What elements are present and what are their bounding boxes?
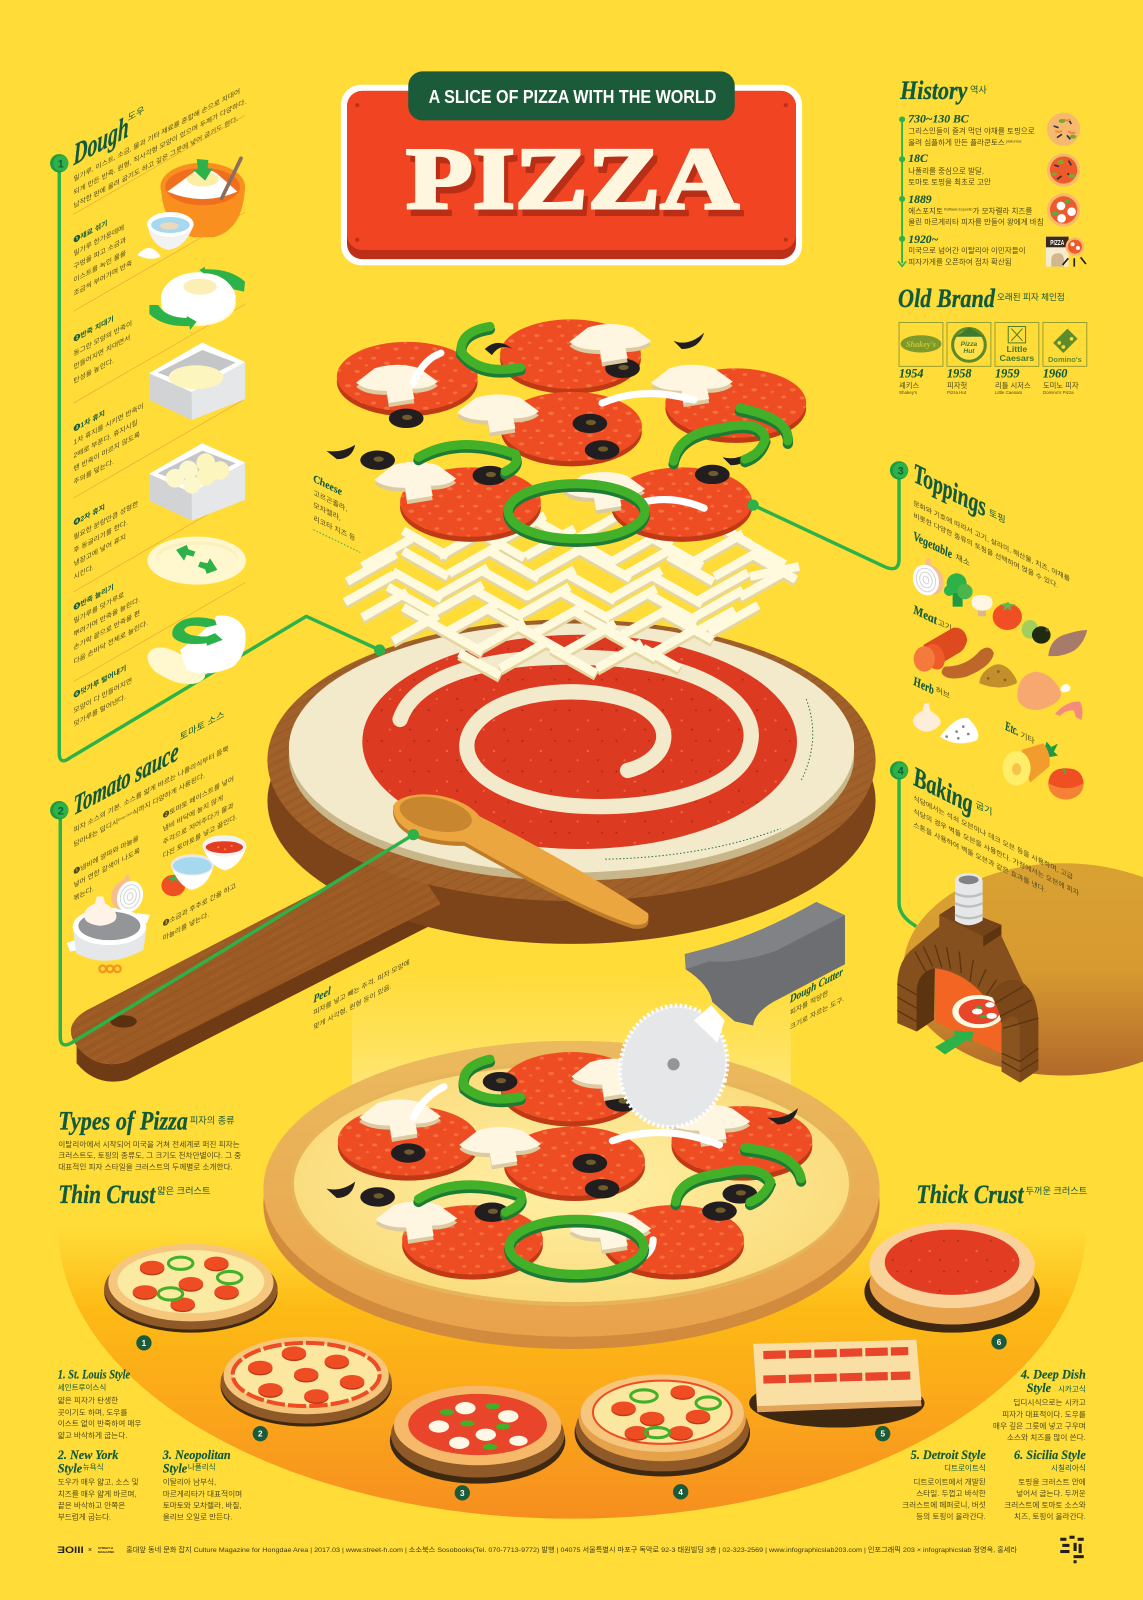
- style 3 text: 토마토와 모차렐라, 바질,: [163, 1500, 242, 1510]
- sauce steps 2 and 3: 다진 토마토를 넣고 끓인다.: [163, 812, 237, 860]
- panel: tomato sauce: [74, 706, 229, 903]
- step 2: 만들어지면 치대면서: [74, 333, 130, 371]
- style 4 text: Style: [1027, 1381, 1052, 1395]
- icon: sauce bowl: [202, 835, 247, 871]
- section number 4: 4: [897, 765, 904, 777]
- icon: tomato pizza: [1047, 153, 1080, 187]
- style 1 text: 세인트루이스식: [58, 1382, 106, 1392]
- brand 1959: 리틀 시저스: [995, 381, 1031, 390]
- callout: dough cutter: 크기로 자르는 도구.: [790, 994, 844, 1031]
- icon: tomato: [161, 874, 185, 896]
- icon: water bowl: [171, 854, 214, 890]
- callout: dough cutter: 피자를 적당한: [790, 988, 829, 1017]
- style 6 text: 6. Sicilia Style: [1014, 1448, 1086, 1462]
- label: vegetable Korean: 채소: [956, 552, 970, 568]
- section number 3: [890, 461, 908, 480]
- entry 18C: 토마토 토핑을 최초로 고안: [908, 177, 991, 187]
- step 2: 탄성을 높인다.: [74, 356, 114, 386]
- number badges: [136, 1334, 1007, 1501]
- icon: sausage: [942, 648, 994, 678]
- number badges: 5: [880, 1430, 885, 1439]
- step 5: 다음 손바닥 전체로 늘린다.: [74, 618, 148, 666]
- entry 730-130 BC: 730~130 BC: [908, 112, 969, 125]
- style 6 text: 치즈, 토핑이 올라간다.: [1014, 1511, 1086, 1521]
- logo: Pizza Hut: Hut: [963, 348, 975, 355]
- entry 730-130 BC: plakuntos: [1005, 139, 1022, 143]
- sauce steps 2 and 3: 마늘리를 넣는다.: [163, 910, 209, 943]
- intro: 이탈리아에서 시작되어 미국을 거쳐 전세계로 퍼진 피자는: [58, 1139, 240, 1149]
- panel: toppings text: [913, 456, 1070, 765]
- icon: pizzeria: [1046, 237, 1086, 267]
- style 2 text: 치즈를 매우 얇게 바르며,: [58, 1488, 137, 1498]
- section number 1: [50, 154, 68, 172]
- style 6 text: 시칠리아식: [1051, 1462, 1086, 1472]
- step 4: 필요한 분량만큼 성형한: [74, 499, 139, 542]
- icon: plate with dough: [147, 537, 246, 585]
- logo: Little Caesars: Little: [1007, 344, 1027, 354]
- label: vegetable: Vegetable: [913, 528, 952, 562]
- footer: [57, 1536, 1084, 1563]
- brand 1960: 1960: [1043, 367, 1067, 381]
- pizza cutter: [606, 902, 845, 1139]
- icon: ground meat: [979, 664, 1017, 687]
- style 5 text: 등의 토핑이 올라간다.: [916, 1511, 986, 1521]
- footer logos: STREET-H: [98, 1546, 113, 1550]
- street-h logo: [1060, 1536, 1084, 1563]
- step 3: 주의를 덮는다.: [74, 457, 114, 487]
- brand 1960: [1043, 367, 1079, 395]
- style 2 text: Style: [58, 1461, 83, 1475]
- baking paragraph: 식당의 경우 벽돌 오븐을 사용한다. 가정에서는 오븐에 피자: [913, 807, 1079, 898]
- brand 1954: Shakey's: [899, 390, 918, 395]
- step 6: 덧가루를 털어낸다.: [74, 692, 126, 728]
- entry 730-130 BC: 그리스인들이 즐겨 먹던 야채를 토핑으로: [908, 126, 1035, 136]
- style 4 text: [993, 1368, 1086, 1442]
- wooden spoon: [393, 791, 648, 929]
- step 4: 시킨다.: [74, 562, 94, 581]
- style 2 text: 뉴욕식: [83, 1462, 104, 1471]
- callout: peel: Peel: [313, 983, 331, 1006]
- logo: Pizza Hut: Pizza: [961, 341, 978, 348]
- history icons: [1046, 113, 1086, 267]
- sauce steps 2 and 3: 주걱으로 저어주다가 물과: [163, 800, 234, 847]
- entry 1889: 올린 마르게리타 피자를 만들어 왕에게 바침: [908, 216, 1044, 226]
- label: etc: 기타: [1020, 730, 1035, 746]
- step 1: 밀가루 한가운데에: [74, 223, 124, 258]
- style 2 text: [57, 1448, 139, 1521]
- intro: [58, 1139, 241, 1171]
- baked pizza: [263, 1041, 880, 1349]
- pizza 1: St. Louis: [104, 1244, 278, 1333]
- sauce step 1: ❶냄비에 양파와 마늘을: [74, 833, 139, 876]
- step 6: [74, 660, 132, 728]
- step 1: [74, 205, 133, 298]
- sauce steps 2 and 3: ❸소금과 후추로 간을 하고: [163, 881, 236, 928]
- step 5: 밀가루를 덧가루로: [74, 590, 125, 625]
- sauce steps 2 and 3: ❷토마토 페이스트를 넣어: [163, 774, 234, 820]
- heading: Korean: 오래된 피자 체인점: [997, 291, 1065, 302]
- entry 730-130 BC: [908, 112, 1035, 147]
- brand 1959: Little Caesars: [995, 390, 1023, 395]
- pizza 4: Deep Dish style: [575, 1374, 750, 1477]
- heading: Baking: Baking: [913, 759, 973, 821]
- arrow: into oven: [935, 1031, 973, 1055]
- thin and thick crust backdrop arc: [58, 1228, 1086, 1519]
- right pillar: [990, 980, 1038, 1082]
- logo: Little Caesars: Caesars: [1000, 353, 1034, 363]
- step 1: 조금씩 부어가며 반죽: [74, 258, 133, 298]
- step 3: 땐 반죽이 마르지 않도록: [74, 429, 140, 473]
- entry 18C: 나폴리를 중심으로 발달,: [908, 165, 984, 175]
- style 2 text: 끝은 바삭하고 안쪽은: [58, 1500, 125, 1510]
- entry 18C: 18C: [908, 152, 928, 165]
- pizza 3: Neapolitan: [390, 1386, 565, 1484]
- toppings: [327, 1052, 812, 1280]
- step 3: 2배로 부푼다. 휴지시킬: [74, 418, 138, 460]
- intro: 대표적인 피자 스타일을 크러스트의 두께별로 소개한다.: [58, 1161, 233, 1171]
- footer logos: MAGAZINE: [98, 1550, 114, 1554]
- heading: Dough: Dough: [73, 110, 129, 173]
- step 2: [74, 304, 132, 386]
- style 6 text: 넣어서 굽는다. 두꺼운: [1016, 1488, 1086, 1498]
- icon: mushroom: [972, 595, 993, 616]
- number badges: 3: [460, 1489, 465, 1498]
- connector nodes: [374, 499, 759, 840]
- icon: chicken: [1017, 672, 1070, 710]
- dough intro: 밀가루, 이스트, 소금, 물과 기타 재료를 혼합해 손으로 치대어: [74, 87, 240, 184]
- section number 3: 3: [897, 465, 904, 477]
- icon: garlic: [913, 703, 941, 732]
- panel: types of pizza: [58, 1106, 1087, 1209]
- heading: Types of Pizza: Types of Pizza: [58, 1106, 188, 1136]
- cheese shreds: [345, 513, 799, 679]
- subtitle pill: A SLICE OF PIZZA WITH THE WORLD: [429, 86, 716, 107]
- style 5 text: [902, 1448, 986, 1521]
- style 5 text: 디트로이트에서 개발된: [913, 1477, 986, 1487]
- label: herb: Herb: [913, 673, 934, 698]
- step 3: [74, 388, 144, 487]
- style 4 text: 시카고식: [1058, 1384, 1086, 1393]
- sauce intro: 담아내는 딥디시: [74, 818, 118, 849]
- callout: cheese: Cheese: [313, 471, 342, 498]
- icon: broccoli: [944, 573, 973, 607]
- label: meat Korean: 고기: [938, 618, 952, 633]
- step 1: ❶재료 섞기: [74, 218, 107, 245]
- brand 1959: [995, 367, 1031, 395]
- icon: margherita: [1047, 193, 1080, 227]
- brand 1960: Domino's Pizza: [1043, 390, 1074, 395]
- glow behind baked pizza: [352, 969, 791, 1122]
- entry 1889: 1889: [908, 193, 932, 206]
- step 3: 1차 휴지를 시키면 반죽이: [74, 401, 144, 447]
- label: herb Korean: 허브: [936, 685, 950, 701]
- sauce step 1: 볶는다.: [74, 884, 94, 903]
- style 4 text: 피자가 대표적이다. 도우를: [1002, 1409, 1086, 1419]
- style 4 text: 4. Deep Dish: [1020, 1368, 1086, 1382]
- intro: 크러스트도, 토핑의 종류도, 그 크기도 천차만별이다. 그 중: [58, 1150, 241, 1160]
- style 2 text: 도우가 매우 얇고, 소스 및: [58, 1477, 139, 1487]
- title panel: [341, 71, 802, 265]
- icon: garlic: [84, 897, 116, 926]
- floating toppings: [327, 319, 806, 542]
- label: meat: Meat: [913, 602, 938, 629]
- sauce intro: Deep Dish: [118, 811, 133, 822]
- timeline: [898, 116, 906, 266]
- pizza in oven: [952, 995, 1004, 1028]
- label: etc: [1005, 718, 1035, 748]
- entry 1920: [908, 233, 1026, 266]
- entry 1889: Raffaele Esposito: [943, 208, 973, 212]
- brand 1954: 1954: [899, 367, 924, 381]
- brand 1958: Pizza Hut: [947, 390, 967, 395]
- entry 730-130 BC: 올려 심플하게 만든 플라쿤토스: [908, 138, 1005, 147]
- footer credits: 홍대앞 동네 문화 잡지 Culture Magazine for Hongdae Area | 2017.03 | www.street-h.com | 소소북스 Sosobooks(Tel. 070-7713-9772) 발행 | 04075 서울특별시 마포구 독막로 92-3 태원빌딩 3층 | 02-323-2569 | www.infographicslab203.com | 인포그래픽 203 × infographicslab 정영옥, 홍세라: [126, 1545, 1017, 1554]
- step 5: ❺반죽 늘리기: [74, 582, 114, 612]
- brand 1954: [899, 367, 924, 395]
- divider lines: [74, 115, 245, 682]
- style 1 text: 얇은 피자가 탄생한: [58, 1395, 118, 1405]
- heading: Korean: 도우: [128, 104, 145, 124]
- callout: cheese: 모차렐라,: [313, 501, 341, 522]
- style 5 text: 스타일. 두껍고 바삭한: [916, 1488, 986, 1498]
- icon: dough balls in box: [149, 443, 245, 521]
- heading: Thin Crust: 얇은 크러스트: [157, 1185, 210, 1196]
- callout: cheese: [313, 471, 360, 552]
- chimney: [955, 873, 983, 925]
- peel: wooden board: [71, 619, 876, 1082]
- heading: Toppings: Toppings: [913, 456, 986, 524]
- style 2 text: 부드럽게 굽는다.: [58, 1511, 111, 1521]
- callout: peel: [313, 942, 410, 1031]
- icon: black olive: [1032, 626, 1051, 644]
- subtitle pill: [408, 71, 735, 120]
- icon: tomato half: [1048, 768, 1084, 800]
- icon: pizzeria: PIZZA: [1050, 238, 1065, 247]
- panel: old brand: [898, 283, 1087, 395]
- style 6 text: 크러스트에 토마토 소스와: [1004, 1500, 1086, 1510]
- heading: Thin Crust: Thin Crust: [58, 1179, 156, 1209]
- brand 1960: 도미노 피자: [1043, 381, 1079, 390]
- style 3 text: 3. Neopolitan: [162, 1448, 231, 1462]
- callout: dough cutter: [789, 964, 844, 1032]
- dough intro: 납작한 판에 올려 굽기도 하고 깊은 그릇에 넣어 굽기도 한다.: [74, 114, 238, 210]
- oven dome shadow: [903, 863, 1143, 1076]
- baking paragraph: 스톤을 사용하여 벽돌 오븐과 같은 효과를 낸다.: [913, 820, 1046, 894]
- title card: [341, 85, 802, 265]
- icon: green olive: [1022, 620, 1038, 639]
- icon: dough in box: [149, 343, 245, 420]
- icon: pineapple: [1003, 742, 1058, 786]
- step 2: 동그란 모양의 반죽이: [74, 318, 132, 358]
- heading: Korean: 토마토 소스: [180, 708, 224, 743]
- footer logos: ×: [88, 1546, 92, 1554]
- icon: sweet potato: [1048, 630, 1087, 656]
- brand 1958: [947, 367, 971, 395]
- step 4: 후 동글리기를 한다.: [74, 518, 128, 555]
- section number 2: 2: [58, 805, 64, 817]
- number badges: 2: [258, 1430, 263, 1439]
- style 5 text: 크러스트에 페퍼로니, 버섯: [902, 1500, 986, 1510]
- brick oven: [897, 873, 1038, 1082]
- style 6 text: 토핑을 크러스트 안에: [1018, 1477, 1086, 1487]
- crust: [263, 1041, 880, 1349]
- toppings intro: 문화와 기호에 따라서 고기, 살라미, 해산물, 치즈, 야채를: [913, 498, 1070, 584]
- handle: [685, 902, 845, 1026]
- sauce intro: 식까지 다양하게 사용된다.: [132, 771, 205, 818]
- sauce step 1: [74, 832, 140, 903]
- sauce intro: 피자 소스의 기본. 소스를 얇게 바르는 나폴리식부터 듬뿍: [74, 743, 229, 835]
- style 1 text: 곳이기도 하며, 도우를: [58, 1407, 127, 1417]
- connector lines: [59, 163, 916, 1045]
- heading: Thick Crust: Thick Crust: [916, 1179, 1025, 1209]
- brand 1958: 피자헛: [947, 381, 967, 390]
- icon: onion: [107, 875, 147, 916]
- brand 1958: 1958: [947, 367, 971, 381]
- callout: dough cutter: Dough Cutter: [789, 964, 843, 1006]
- oven opening: [935, 968, 1002, 1054]
- number badges: 1: [142, 1339, 147, 1348]
- number badges: 6: [997, 1338, 1002, 1347]
- callout: cheese: 고르곤졸라,: [313, 488, 347, 513]
- style 4 text: 딥디시식으로는 시카고: [1013, 1397, 1086, 1407]
- toppings intro: 비롯한 다양한 종류의 토핑을 선택하여 얹을 수 있다.: [913, 511, 1058, 590]
- style 1 text: 얇고 바삭하게 굽는다.: [58, 1430, 127, 1440]
- pizza 5: Detroit: [749, 1340, 925, 1428]
- panel: dough illustrations: [137, 158, 246, 684]
- entry 1889: 에스포지토: [908, 206, 943, 215]
- icon: dough ball: [149, 267, 245, 330]
- step 5: 손가락 끝으로 반죽을 편: [74, 608, 140, 652]
- step 5: 뿌려가며 반죽을 늘린다.: [74, 595, 140, 639]
- heading: History: History: [899, 75, 968, 105]
- panel: history: [898, 75, 1086, 267]
- brick lines: [897, 945, 1038, 1072]
- brand 1959: 1959: [995, 367, 1019, 381]
- entry 1920: 1920~: [908, 233, 939, 246]
- style 4 text: 매우 깊은 그릇에 넣고 구우며: [993, 1421, 1086, 1431]
- section number 4: [890, 761, 908, 780]
- icon: stretching dough: [147, 616, 246, 684]
- step 3: ❸1차 휴지: [74, 408, 105, 434]
- style 1 text: 1. St. Louis Style: [58, 1368, 131, 1382]
- oven body: [897, 906, 1038, 1082]
- heading: Thick Crust: 두꺼운 크러스트: [1026, 1186, 1087, 1196]
- heading: Korean: 역사: [970, 85, 987, 95]
- callout: cheese: 리코타 치즈 등: [313, 514, 356, 543]
- section number 2: [50, 801, 68, 819]
- callout: peel: 맞게 사각형, 원형 등이 있음.: [313, 982, 391, 1031]
- entry 18C: [908, 152, 991, 187]
- entry 1920: 미국으로 넘어간 이탈리아 이민자들이: [908, 245, 1026, 255]
- sauce steps 2 and 3: 냄비 바닥에 눌지 않게: [163, 793, 223, 834]
- logo: Shakey's: Shakey's: [906, 340, 936, 349]
- label: etc: Etc.: [1005, 718, 1018, 740]
- step 4: [74, 484, 139, 581]
- entry 1889: [908, 193, 1044, 226]
- entry 1889: 가 모차렐라 치즈를: [973, 206, 1032, 215]
- brand 1954: 셰키스: [899, 381, 920, 390]
- step 6: 모양이 다 만들어지면: [74, 676, 132, 715]
- heading: toppings Korean: 토핑: [989, 507, 1006, 526]
- style 3 text: 나폴리식: [188, 1462, 216, 1471]
- sauce steps 2 and 3: [163, 772, 237, 943]
- style 3 text: 이탈리아 남부식,: [163, 1477, 216, 1487]
- style 4 text: 소스와 치즈를 많이 쓴다.: [1007, 1432, 1086, 1442]
- footer logos: [57, 1545, 114, 1555]
- style 3 text: Style: [163, 1461, 188, 1475]
- step 1: 이스트를 녹인 물을: [74, 248, 126, 285]
- style 6 text: [1004, 1448, 1086, 1521]
- pizza 6: Sicilia: [864, 1222, 1040, 1333]
- heading: Old Brand: Old Brand: [898, 283, 996, 313]
- style 5 text: 5. Detroit Style: [911, 1448, 986, 1462]
- panel: baking text: [913, 759, 1079, 911]
- toppings illustrations: [909, 558, 1087, 800]
- chimney base: [939, 906, 1002, 947]
- logo: Domino's: Domino's: [1048, 356, 1082, 364]
- icon: tomato: [993, 601, 1022, 630]
- heading: baking Korean: 굽기: [976, 799, 992, 818]
- logo: Shakey's: [899, 322, 943, 366]
- icon: salt: [940, 718, 978, 743]
- icon: water bowl: [137, 212, 194, 259]
- logo: Domino's: [1043, 322, 1087, 366]
- logo: Little Caesars: [995, 322, 1039, 366]
- icon: onion: [909, 558, 948, 599]
- icon: pepperoni stick: [914, 628, 967, 672]
- icon: mixing bowl: [160, 158, 245, 237]
- blade: [606, 993, 741, 1139]
- style 3 text: [162, 1448, 242, 1521]
- pizza dough with tomato sauce spiral: [289, 623, 854, 881]
- style 3 text: 올리브 오일로 만든다.: [163, 1512, 232, 1521]
- main title: PIZZA: [410, 136, 743, 233]
- dough intro: 되게 만든 반죽. 원형, 직사각형 모양이 있으며 두께가 다양하다.: [74, 97, 246, 197]
- style 5 text: 디트로이트식: [944, 1462, 986, 1472]
- section number 1: 1: [58, 158, 64, 170]
- step 4: 냉장고에 넣어 휴지: [74, 532, 126, 568]
- pizza 2: New York: [220, 1337, 392, 1427]
- left pillar inner: [917, 968, 935, 1032]
- heading: Korean: 피자의 종류: [190, 1115, 235, 1125]
- style 1 text: 이스트 없이 반죽하여 매우: [58, 1418, 141, 1428]
- icon: plakuntos: [1047, 113, 1080, 146]
- heading: Tomato sauce: Tomato sauce: [74, 736, 179, 822]
- logo: Pizza Hut: [947, 322, 991, 366]
- footer logos: ƎOIII: [57, 1545, 84, 1555]
- sauce illustrations: [67, 835, 247, 972]
- style 2 text: 2. New York: [57, 1448, 119, 1462]
- step 5: [74, 564, 148, 666]
- baking paragraph: 식당에서는 석쇠 오븐이나 데크 오븐 등을 사용하며, 고급: [913, 793, 1073, 882]
- style 1 text: [58, 1368, 141, 1440]
- step 1: 구멍을 파고 소금과: [74, 235, 126, 271]
- number badges: 4: [678, 1488, 683, 1497]
- icon: pot: [67, 908, 150, 972]
- step 6: ❻덧가루 털어내기: [74, 663, 126, 700]
- step 2: ❷반죽 치대기: [74, 314, 114, 344]
- main title: PIZZA: [406, 130, 739, 227]
- step 4: ❹2차 휴지: [74, 502, 105, 527]
- panel: dough text: [73, 47, 246, 729]
- callout: peel: 피자를 넣고 빼는 주걱. 피자 모양에: [313, 958, 410, 1017]
- sauce step 1: 넣어 연한 갈색이 나도록: [74, 846, 140, 890]
- entry 1920: 피자가게를 오픈하여 점차 확산됨: [908, 256, 1012, 266]
- style 3 text: 마르게리타가 대표적이며: [163, 1488, 242, 1498]
- icon: shrimp: [1055, 702, 1082, 720]
